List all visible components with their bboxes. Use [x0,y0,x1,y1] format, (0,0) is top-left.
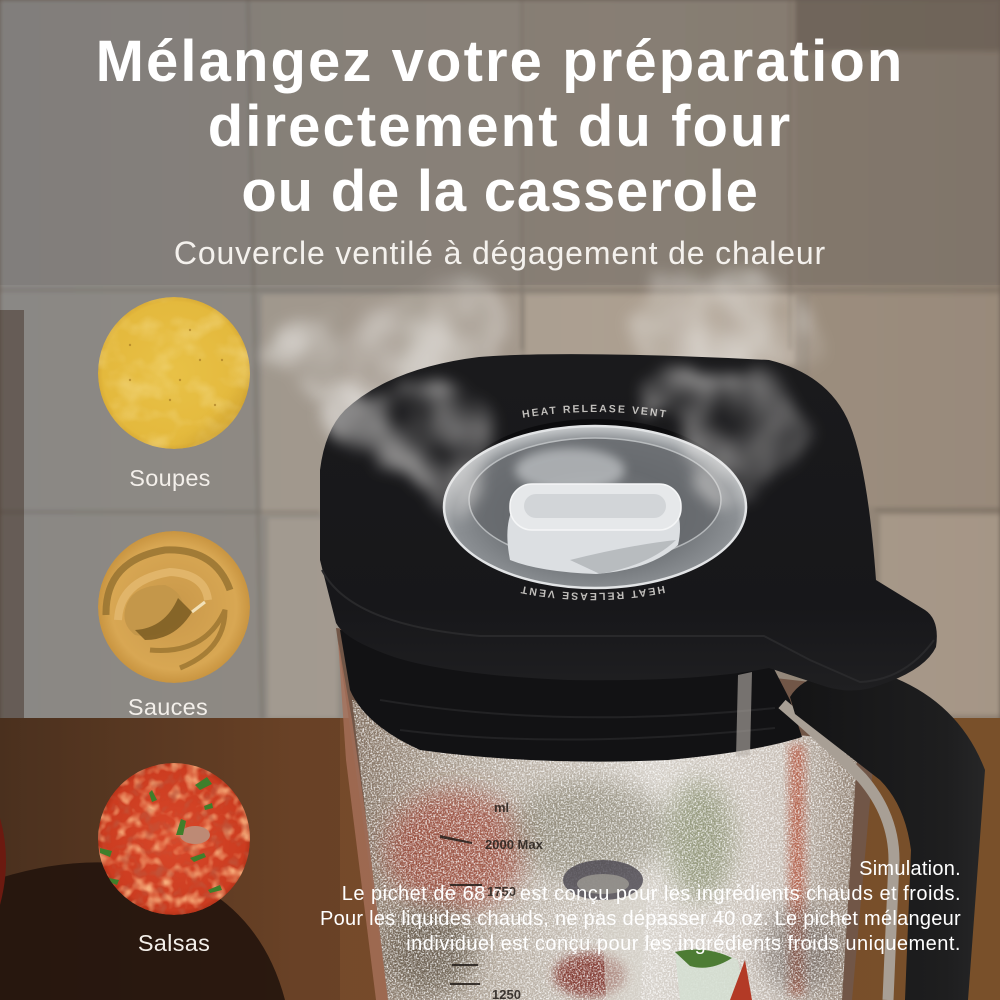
metal strip [782,704,894,1000]
vent label bottom: HEAT RELEASE VENT [520,586,665,600]
food photo: salsa [98,763,250,915]
red fruit on the left edge [0,818,6,905]
vent label top: HEAT RELEASE VENT [522,404,666,418]
footnote [320,858,961,955]
scale markings: 1750 [487,884,516,899]
subtitle: Couvercle ventilé à dégagement de chaleur [174,235,826,271]
footnote: individuel est conçu pour les ingrédients froids uniquement. [406,933,961,955]
dark shape on counter [0,862,285,1000]
footnote: Simulation. [859,858,961,880]
blade assembly [600,880,648,1000]
title: ou de la casserole [241,159,759,224]
footnote: Le pichet de 68 oz est conçu pour les ingrédients chauds et froids. [342,883,961,905]
handle [782,673,985,1000]
vent cap [444,419,746,588]
left shadow [0,310,24,718]
vent plug [507,498,680,574]
lid [320,354,937,690]
dark top shading [0,0,1000,285]
title [96,29,904,224]
scale markings: 2000 Max [485,837,544,852]
title: directement du four [208,94,792,159]
wall [0,0,1000,725]
steam over the lid [330,363,807,516]
food photo: sauce [98,531,250,683]
label: salsas: Salsas [138,930,210,956]
dark collar [340,630,802,762]
counter [0,718,1000,1000]
scale markings: ml [494,800,509,815]
footnote: Pour les liquides chauds, ne pas dépasser 40 oz. Le pichet mélangeur [320,908,961,930]
condensation [340,700,860,1000]
title: Mélangez votre préparation [96,29,904,94]
pitcher body [336,628,880,1000]
steam behind the lid [270,270,820,405]
label: sauces: Sauces [128,694,208,720]
label: soups: Soupes [129,465,211,491]
scale markings [440,800,544,1000]
food photo: soup [98,297,250,449]
